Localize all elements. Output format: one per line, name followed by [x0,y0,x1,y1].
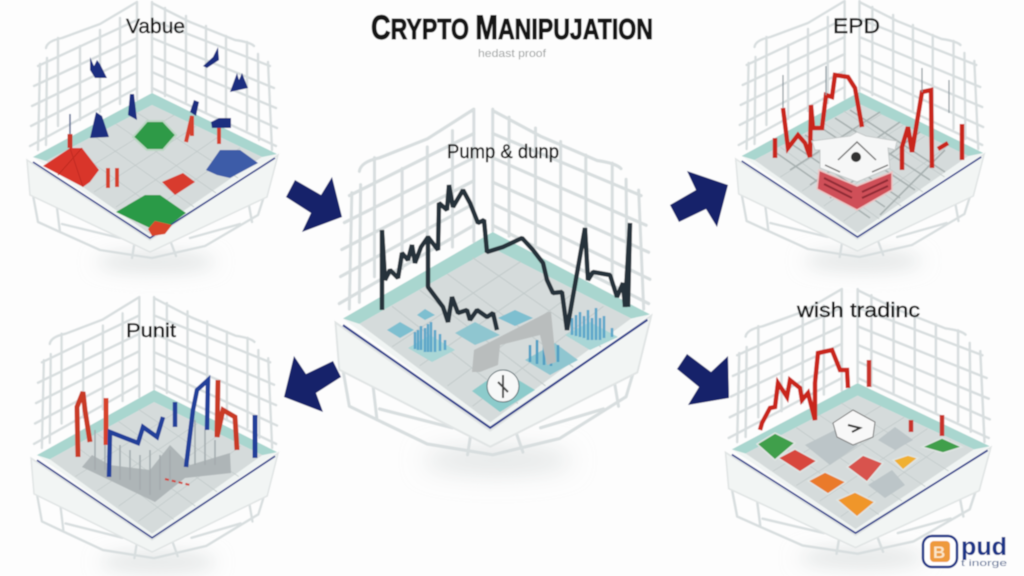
white cube icon [833,410,875,445]
cobble floor [775,110,945,218]
black price line [382,185,630,330]
grey tower [472,312,556,372]
dark floor patches [805,427,913,498]
red candles line left [783,75,862,157]
arrow: to Punit [284,356,341,412]
red line left [77,392,90,457]
red price line [760,350,848,430]
red specks [165,479,190,485]
small red platform [162,173,195,195]
green pyramid back [133,121,176,150]
red posts and wicks [775,124,962,160]
red posts [869,360,942,436]
heading: Pump & dunp: Pump & dunp [447,142,559,163]
red candles line right [902,90,932,170]
subtitle: hedast proof [478,48,547,60]
red pyramid [43,148,99,187]
heading: EPD: EPD [833,15,880,38]
red post [104,398,108,445]
blue line left [109,417,163,477]
logo [923,533,1007,568]
red speckle [148,221,172,236]
blue line right [186,380,208,467]
title: CRYPTO MANIPUJATION [371,9,653,47]
red posts [108,116,219,188]
arrow: to center from Vabue [286,177,342,232]
logo tagline: t inorge [961,558,1007,568]
panel: Vabue [27,2,278,272]
logo wordmark: pud [961,533,1007,561]
panel: Pump & dunp [335,109,651,474]
navy shards [90,47,248,138]
heading: Vabue: Vabue [126,16,185,38]
logo: B [933,543,945,562]
blue post [173,402,177,427]
red post [68,134,72,148]
red line right [217,380,237,450]
coloured tiles [757,433,962,517]
blue post right [252,415,258,458]
arrow: to wish tradinc [677,354,729,405]
heading: Punit: Punit [126,321,177,342]
green pyramid front [116,195,186,228]
panel: Punit [31,297,278,572]
coin icon [472,370,535,412]
white structure [812,132,897,182]
red vault base [817,170,892,210]
spiky crystal clusters [387,308,618,375]
blue pyramid [206,150,258,178]
grey bars [82,420,231,502]
arrow: to EPD [670,171,728,227]
panel: EPD [736,1,984,271]
panel: wish tradinc [726,289,991,568]
heading: wish tradinc: wish tradinc [796,300,920,322]
logo badge [923,536,957,567]
black price line lower [428,237,497,330]
